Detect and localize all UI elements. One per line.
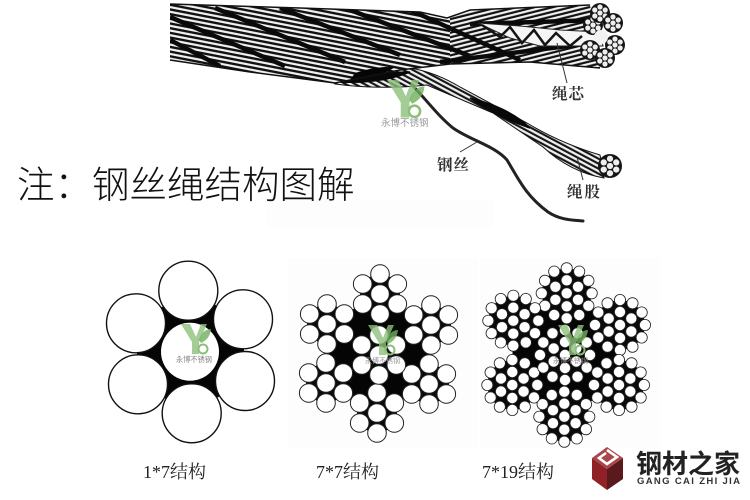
logo: pinyin: GANG CAI ZHI JIA [637, 476, 740, 487]
title: 注：钢丝绳结构图解 [17, 164, 354, 206]
watermark: 1*7 [176, 324, 212, 364]
steel wire [411, 84, 583, 221]
label: rope core: 绳芯 [552, 85, 586, 103]
caption: 7*7: 7*7结构 [316, 462, 379, 482]
watermark: rope [381, 80, 429, 129]
leader lines [460, 43, 583, 180]
caption: 1*7: 1*7结构 [143, 462, 206, 482]
diagram: 7*7 structure [299, 265, 458, 442]
watermark: rope: 永博不锈钢 [381, 117, 429, 129]
label: steel wire: 钢丝 [437, 156, 470, 174]
caption: 7*19: 7*19结构 [482, 462, 554, 482]
rope strand ends [580, 3, 625, 178]
logo: wordmark: 钢材之家 [636, 449, 740, 479]
rope body [170, 4, 600, 82]
exposed core [478, 23, 603, 46]
watermark: 7*19 [553, 325, 588, 365]
logo: cube icon [592, 447, 623, 490]
diagram: 7*19 structure [482, 263, 651, 447]
wire rope illustration [170, 0, 625, 221]
watermark: 1*7: 永博不锈钢 [176, 355, 212, 364]
watermark: 7*7: 永博不锈钢 [365, 356, 400, 365]
label: strand: 绳股 [567, 183, 602, 201]
lifted strand [330, 68, 604, 178]
watermark: 7*19: 永博不锈钢 [553, 356, 588, 365]
diagram: 1*7 structure [106, 261, 274, 443]
watermark: 7*7 [365, 325, 400, 365]
